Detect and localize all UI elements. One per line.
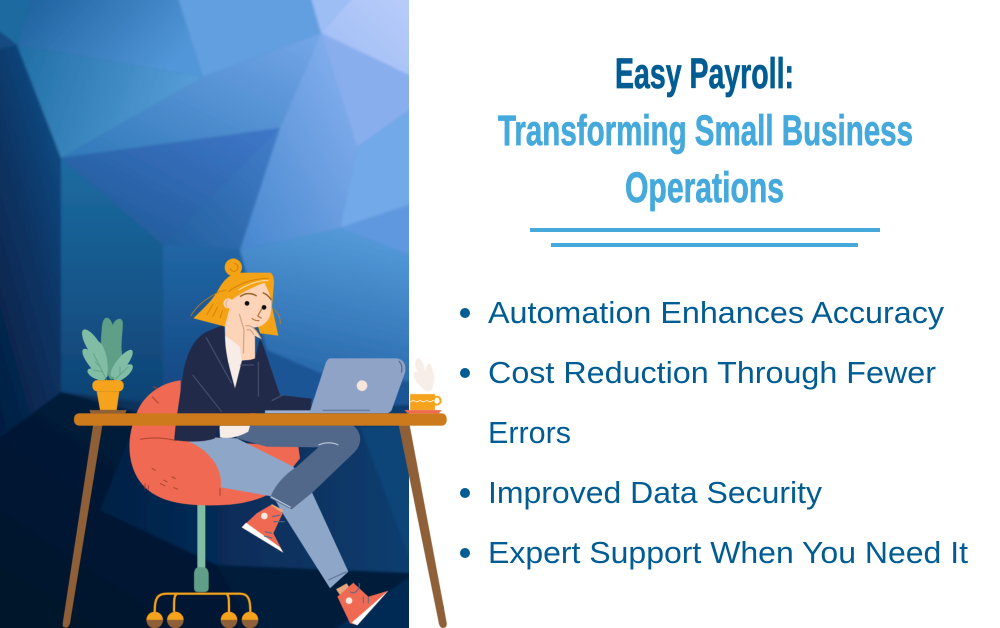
bullet: automation: Automation Enhances Accuracy [488, 295, 945, 330]
coffee cup [404, 358, 442, 413]
jacket and body [174, 325, 312, 442]
bullet: cost reduction: Cost Reduction Through Fewer [488, 355, 936, 390]
double divider lines [530, 228, 880, 247]
illustration: woman at desk [63, 259, 447, 628]
red shoe upper [242, 504, 285, 553]
chair [129, 380, 300, 628]
panel: faceted blue background [0, 0, 415, 628]
light trouser leg [188, 438, 348, 588]
plant [78, 318, 136, 413]
laptop [265, 358, 405, 413]
heading [498, 50, 913, 212]
bullet: support: Expert Support When You Need It [488, 535, 968, 570]
head with bun, hair and face [191, 259, 281, 361]
dark raised leg [237, 426, 360, 509]
desk [63, 413, 447, 628]
bullet: cost reduction [460, 355, 936, 450]
heading line: Easy Payroll: Easy Payroll: [615, 50, 794, 98]
heading line: Operations: Operations [625, 164, 784, 212]
red shoe lower [336, 583, 388, 625]
bullet list [460, 295, 968, 570]
bullet: cost reduction: Errors [488, 415, 571, 450]
bullet: security: Improved Data Security [488, 475, 823, 510]
